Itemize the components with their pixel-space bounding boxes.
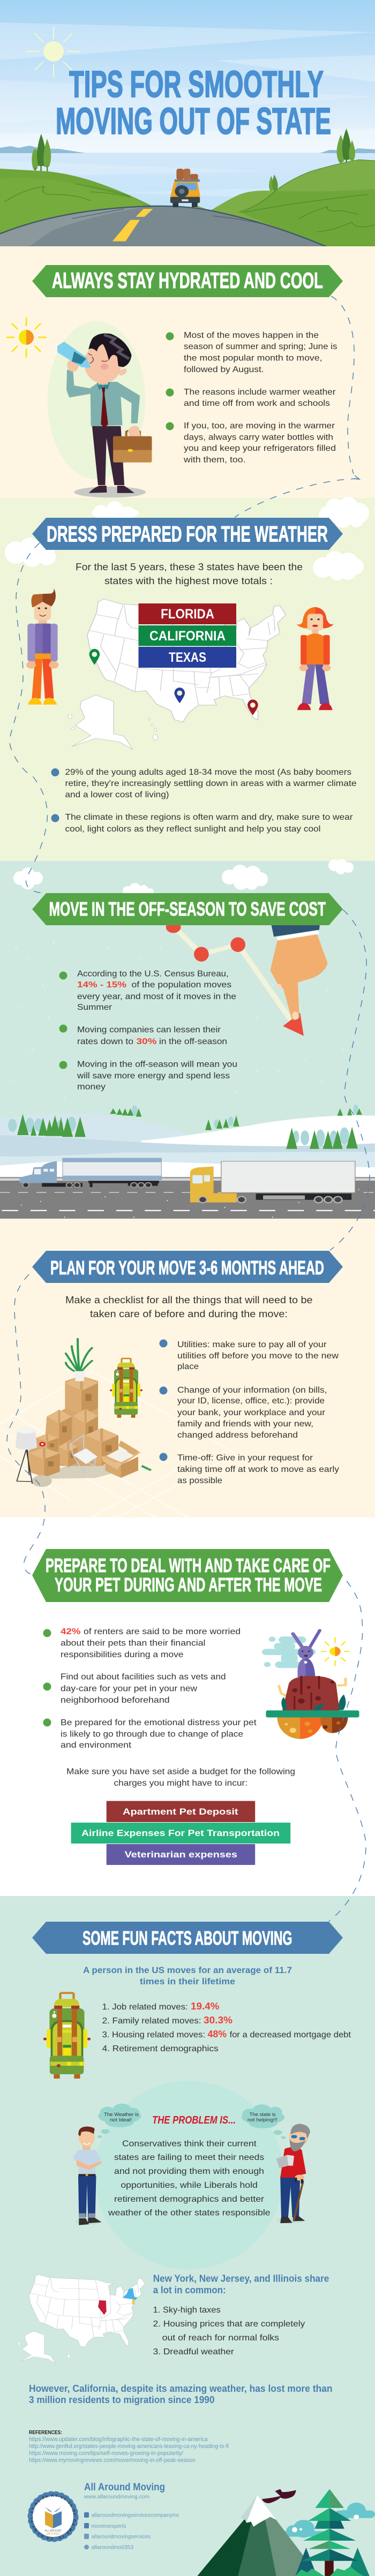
subheading: average moves: times in their lifetime xyxy=(140,1976,235,1986)
list: what the states share: 2. Housing prices that are completely xyxy=(153,2320,305,2329)
illustration: man drinking water xyxy=(48,321,152,497)
bullet list: Most of the moves happen in the xyxy=(184,331,319,340)
bullet list: Moving companies can lessen their xyxy=(77,1025,221,1034)
icon: blue truck xyxy=(20,1158,161,1188)
illustration: woman in orange top xyxy=(297,607,334,710)
lamp xyxy=(32,1475,52,1487)
panel: hero header xyxy=(0,0,375,247)
heading banner xyxy=(32,1549,343,1602)
heading: states in common: a lot in common: xyxy=(153,2285,226,2295)
thought bubble right xyxy=(242,2104,286,2139)
problem paragraph: opportunities, while Liberals hold xyxy=(121,2181,258,2190)
panel: always stay hydrated xyxy=(0,246,375,498)
hill right xyxy=(191,160,375,247)
callout: california xyxy=(29,2383,332,2405)
trees small xyxy=(269,175,278,191)
subheading: average moves: A person in the US moves for an average of 11.7 xyxy=(83,1965,292,1975)
social media handles xyxy=(84,2512,179,2551)
illustration: man in purple sweater xyxy=(26,588,58,705)
icon: car with luggage xyxy=(170,169,200,207)
bullet list: season of summer and spring; June is xyxy=(184,342,338,351)
list: reasons for moving: 2. Family related moves: xyxy=(102,2016,201,2026)
logo: all around moving badge: ALL AROUND xyxy=(44,2529,62,2533)
bullet list: Summer xyxy=(77,1003,112,1012)
hill left xyxy=(0,169,153,236)
bullet list: rates down to xyxy=(77,1037,133,1046)
panel: prepare for your pet xyxy=(0,1517,375,1896)
bullet list: of the population moves xyxy=(132,980,231,989)
bullet list: utilities off before you move to the new xyxy=(177,1351,339,1361)
bullet list: If you, too, are moving in the warmer xyxy=(184,421,335,430)
references: https://www.moving.com/tips/self-moves-growing-in-popularity/ xyxy=(29,2450,184,2457)
heading: states in common xyxy=(153,2273,329,2295)
bullet list xyxy=(59,969,237,1091)
bullet list: days, always carry water bottles with xyxy=(184,433,333,442)
state labels: TEXAS xyxy=(169,650,206,665)
problem circle xyxy=(95,2081,283,2269)
bullet list: every year, and most of it moves in the xyxy=(77,992,236,1001)
state labels: FLORIDA xyxy=(161,607,214,622)
bullet list: in the off-season xyxy=(159,1037,227,1046)
social media handles: moversexperts xyxy=(91,2523,126,2529)
budget charge labels: Airline Expenses For Pet Transportation xyxy=(81,1828,280,1838)
social media handles: allaroundmo0353 xyxy=(91,2544,133,2551)
bullet list: neighborhood beforehand xyxy=(61,1696,170,1705)
bullet list: responsibilities during a move xyxy=(61,1650,184,1659)
illustration: large backpack xyxy=(43,1993,91,2079)
road xyxy=(0,206,326,247)
list: reasons for moving: 30.3% xyxy=(204,2015,232,2026)
intro text: taken care of before and during the move: xyxy=(90,1308,288,1319)
snowflakes on the road xyxy=(21,1189,359,1218)
heading banner xyxy=(32,1922,343,1954)
icon: yellow truck xyxy=(190,1161,355,1203)
bullet list xyxy=(51,768,357,834)
bullet list: your bank, your workplace and your xyxy=(177,1408,326,1417)
panel: dress prepared for the weather xyxy=(0,497,375,862)
illustration: backpack xyxy=(110,1358,142,1418)
hero landscape: hills, road, car xyxy=(0,129,375,247)
company name and website: All Around Moving xyxy=(84,2482,165,2493)
panel: some fun facts about moving xyxy=(0,1896,375,2576)
bullet list: Time-off: Give in your request for xyxy=(177,1453,313,1462)
intro text xyxy=(76,561,303,586)
trees right xyxy=(337,129,355,163)
bullet list: cool, light colors as they reflect sunlight and help you stay cool xyxy=(65,825,320,834)
callout: california: 3 million residents to migration since 1990 xyxy=(29,2394,214,2405)
references: https://www.updater.com/blog/infographic-the-state-of-moving-in-america xyxy=(29,2436,208,2443)
heading banner xyxy=(32,518,343,550)
bullet list: will save more energy and spend less xyxy=(77,1071,230,1081)
problem paragraph: weather of the other states responsible xyxy=(108,2209,271,2218)
intro text: Make a checklist for all the things that will need to be xyxy=(65,1294,313,1305)
callout: california: However, California, despite its amazing weather, has lost more than xyxy=(29,2383,332,2394)
bullet list: of renters are said to be more worried xyxy=(84,1627,241,1636)
bullet list: retire, they're increasingly settling down in areas with a warmer climate xyxy=(65,779,357,788)
social media handles: allaroundmovingservices xyxy=(91,2534,151,2540)
open box xyxy=(103,1451,141,1465)
list: reasons for moving: 3. Housing related moves: xyxy=(102,2030,205,2039)
bullet list: According to the U.S. Census Bureau, xyxy=(77,969,229,978)
bullet list: Find out about facilities such as vets and xyxy=(61,1673,226,1681)
budget charge labels xyxy=(71,1801,290,1865)
bullet list: 14% - 15% xyxy=(77,980,126,989)
illustration: young man with crossed arms xyxy=(73,2127,102,2225)
bullet list xyxy=(43,1627,257,1750)
icon: hero sun xyxy=(27,27,80,77)
illustration: winter highway with trucks xyxy=(0,1105,375,1219)
dashed route connecting the sections xyxy=(7,296,370,1921)
road markings xyxy=(0,1191,375,1193)
bullet list xyxy=(160,1340,339,1485)
clouds xyxy=(5,497,369,580)
illustration: rabbit on a rock xyxy=(262,1630,350,1677)
bullet list: is likely to go through due to change of place xyxy=(61,1730,243,1739)
subheading: average moves xyxy=(83,1965,292,1986)
references: https://www.mymovingreviews.com/move/moving-in-off-peak-season xyxy=(29,2457,196,2464)
references: http://www.genfkd.org/states-people-moving-americans-leaving-ca-ny-heading-tx-fl xyxy=(29,2443,229,2450)
logo: all around moving badge: CA·NJ·NY·FL·CT·NC·PA·KY·VT·VA·DC·GA·MD·TX· xyxy=(30,2494,76,2540)
illustration: mountain, pine tree and bat xyxy=(197,2489,375,2576)
list: what the states share: 1. Sky-high taxes xyxy=(153,2306,221,2315)
bullet list: place xyxy=(177,1362,199,1371)
heading banner xyxy=(32,1251,343,1283)
illustration: pointing hand xyxy=(270,925,328,1020)
list: what the states share: 3. Dreadful weather xyxy=(153,2347,234,2356)
budget intro text: charges you might have to incur: xyxy=(114,1779,248,1788)
social media handles: allaroundmovingservicescompanyinc xyxy=(91,2512,179,2519)
bullet list: about their pets than their financial xyxy=(61,1638,206,1648)
map pins xyxy=(89,649,258,715)
company name and website xyxy=(84,2482,165,2500)
bullet list: changed address beforehand xyxy=(177,1431,298,1440)
snow speckles xyxy=(10,941,343,1098)
problem paragraph: Conservatives think their current xyxy=(122,2140,257,2148)
problem paragraph: retirement demographics and better xyxy=(114,2195,265,2204)
illustration: old man with cane xyxy=(276,2124,310,2223)
company name and website: www.allaroundmoving.com xyxy=(84,2494,149,2500)
bullet list: day-care for your pet in your new xyxy=(61,1684,197,1694)
bullet list: you and keep your refrigerators filled xyxy=(184,444,336,453)
problem paragraph: states are failing to meet their needs xyxy=(114,2153,264,2162)
budget charge labels: Apartment Pet Deposit xyxy=(123,1807,238,1817)
list: reasons for moving: for a decreased mortgage debt xyxy=(230,2030,351,2039)
thought bubble left: The Weather is xyxy=(104,2112,139,2118)
list: reasons for moving xyxy=(102,2001,351,2053)
small US map with highlighted states xyxy=(18,2275,145,2363)
references: REFERENCES: xyxy=(29,2429,62,2436)
state labels xyxy=(138,603,236,668)
US map xyxy=(68,599,286,750)
bullet list: 30% xyxy=(136,1037,156,1046)
bullet list: The reasons include warmer weather xyxy=(184,388,336,397)
bullet list: and environment xyxy=(61,1741,132,1750)
heading: states in common: New York, New Jersey, and Illinois share xyxy=(153,2273,329,2284)
state labels: CALIFORNIA xyxy=(149,629,226,644)
intro text: For the last 5 years, these 3 states have been the xyxy=(76,561,303,572)
panel: plan for your move xyxy=(0,1219,375,1517)
list: reasons for moving: 1. Job related moves: xyxy=(102,2003,188,2012)
bullet list: 42% xyxy=(61,1627,80,1636)
bullet list: Change of your information (on bills, xyxy=(177,1386,327,1395)
budget intro text xyxy=(66,1767,295,1788)
budget charge labels: Veterinarian expenses xyxy=(125,1849,237,1860)
problem paragraph: and not providing them with enough xyxy=(114,2167,264,2176)
bullet list: with them, too. xyxy=(183,456,246,465)
bullet list xyxy=(166,331,338,465)
intro text xyxy=(65,1294,313,1319)
thought bubble left: not Ideal! xyxy=(110,2117,132,2123)
panel: move in the off-season xyxy=(0,859,375,1219)
bullet list: Utilities: make sure to pay all of your xyxy=(177,1340,327,1349)
list: what the states share: out of reach for normal folks xyxy=(162,2333,279,2343)
bullet list: as possible xyxy=(177,1476,222,1485)
bullet list: The climate in these regions is often warm and dry, make sure to wear xyxy=(65,813,353,822)
bullet list: followed by August. xyxy=(184,365,264,374)
chair xyxy=(71,1435,96,1474)
bullet list: Moving in the off-season will mean you xyxy=(77,1060,237,1069)
thought bubble left xyxy=(98,2104,141,2138)
list: reasons for moving: 4. Retirement demographics xyxy=(102,2044,219,2053)
bullet list: Be prepared for the emotional distress your pet xyxy=(61,1718,257,1727)
bullet list: and a lower cost of living) xyxy=(65,790,169,799)
thought bubble right: not helping!!! xyxy=(248,2117,278,2123)
bullet list: money xyxy=(77,1083,106,1091)
distant mountains xyxy=(0,146,375,153)
list: what the states share xyxy=(153,2306,305,2356)
line chart with falling arrow xyxy=(166,921,304,1036)
bullet list: 29% of the young adults aged 18-34 move the most (As baby boomers xyxy=(65,768,351,777)
trees left xyxy=(32,134,51,171)
faint floor pattern xyxy=(0,1371,236,1517)
heading banner xyxy=(32,893,343,925)
problem paragraph xyxy=(108,2140,271,2218)
bullet list: the most popular month to move, xyxy=(184,353,322,363)
illustration: rock base and platform xyxy=(266,1676,359,1739)
bullet list: taking time off at work to move as early xyxy=(177,1465,339,1474)
references xyxy=(29,2429,229,2464)
title xyxy=(56,63,331,142)
heading: the problem is: THE PROBLEM IS... xyxy=(152,2114,236,2126)
bullet list: your ID, license, office, etc.): provide xyxy=(177,1396,325,1406)
budget intro text: Make sure you have set aside a budget for the following xyxy=(66,1767,295,1777)
thought bubble right: The state is xyxy=(250,2112,276,2118)
logo: all around moving badge: MOVING xyxy=(47,2533,59,2536)
list: reasons for moving: 48% xyxy=(208,2029,227,2039)
list: reasons for moving: 19.4% xyxy=(191,2001,219,2012)
heading banner xyxy=(32,265,343,297)
intro text: states with the highest move totals : xyxy=(104,575,273,586)
icon: small sun xyxy=(6,318,47,358)
bullet list: and time off from work and schools xyxy=(184,399,330,408)
bullet list: family and friends with your new, xyxy=(177,1419,313,1429)
clouds xyxy=(13,859,354,896)
plant xyxy=(66,1339,92,1374)
trees xyxy=(8,1105,358,1146)
illustration: moving boxes, plant, lamp and chair xyxy=(16,1339,152,1487)
